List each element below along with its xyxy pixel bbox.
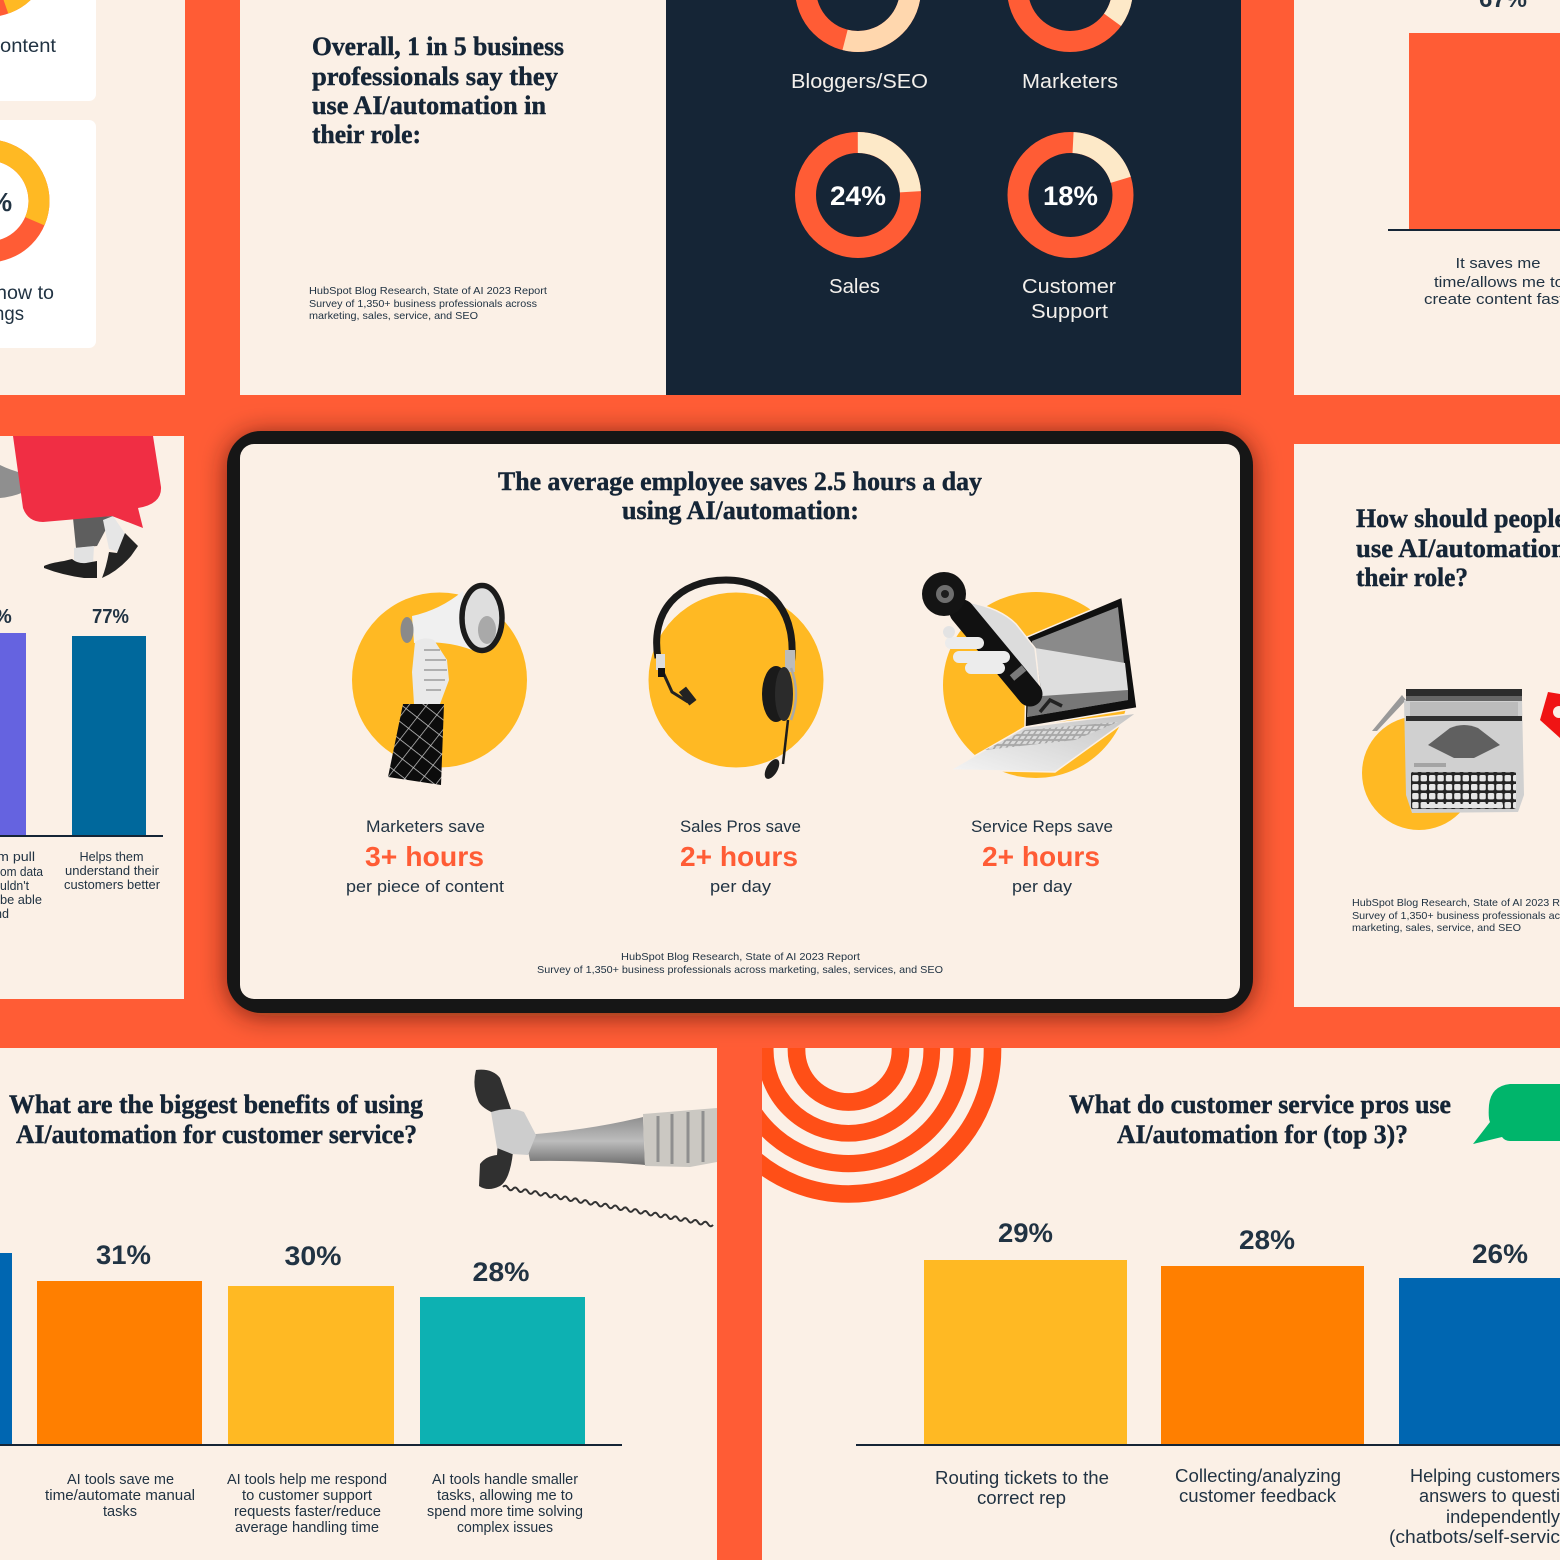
stat: marketers: Marketers save	[366, 818, 485, 836]
icon: red speech bubble	[13, 436, 161, 528]
illustration: headset	[648, 580, 824, 781]
donut: marketers	[1018, 0, 1122, 93]
donut: customer support: Support	[1031, 301, 1108, 323]
heading: average employee: using AI/automation:	[622, 496, 859, 525]
bar caption: It saves me	[1456, 255, 1540, 272]
heading: customer service pros	[1069, 1090, 1451, 1149]
source note	[309, 285, 547, 322]
card: content	[0, 0, 96, 101]
source note: HubSpot Blog Research, State of AI 2023 Report	[621, 951, 860, 963]
panel: middle-right typewriter	[1294, 444, 1560, 1007]
caption: smaller tasks: AI tools handle smaller	[432, 1472, 578, 1488]
heading: average employee: The average employee saves 2.5 hours a day	[498, 467, 982, 496]
caption: customer feedback: customer feedback	[1179, 1486, 1337, 1506]
illustration: megaphone	[352, 586, 527, 785]
source note: HubSpot Blog Research, State of AI 2023 R	[1352, 897, 1560, 909]
stat: service reps: Service Reps save	[971, 818, 1113, 836]
heading: 1 in 5: use AI/automation in	[312, 91, 547, 120]
illustration: walking feet with red bubble	[0, 436, 161, 578]
caption: save time	[45, 1472, 195, 1520]
donut: sales: Sales	[829, 276, 880, 298]
donut: bloggers	[791, 0, 928, 93]
card: know how to	[0, 120, 96, 348]
label: 26%: 26%	[1472, 1239, 1528, 1269]
tablet frame	[227, 431, 1253, 1013]
bar: yellow 29%	[924, 1260, 1127, 1444]
donut: sales: 24%	[830, 181, 886, 211]
panel: top-right bar	[1294, 0, 1560, 395]
bar: purple	[0, 633, 26, 836]
heading: how should people: use AI/automation	[1356, 534, 1560, 563]
stat: service reps: per day	[1012, 877, 1073, 896]
caption: routing tickets	[935, 1468, 1109, 1508]
tablet screen	[240, 444, 1240, 999]
source note: Survey of 1,350+ business professionals ac	[1352, 910, 1560, 922]
icon: red tag	[1540, 692, 1560, 738]
bar caption	[1424, 255, 1560, 308]
caption: respond faster: average handling time	[235, 1520, 379, 1536]
caption: respond faster: requests faster/reduce	[234, 1504, 381, 1520]
panel: central tablet	[227, 431, 1253, 1013]
source note: HubSpot Blog Research, State of AI 2023 Report	[309, 285, 547, 297]
donut: customer support: 18%	[1043, 181, 1098, 211]
heading: 1 in 5: professionals say they	[312, 62, 558, 91]
caption: left bar: uldn't	[0, 878, 29, 893]
donut: marketers: Marketers	[1022, 71, 1118, 93]
bar: yellow 30%	[228, 1286, 394, 1444]
illustration: phone from laptop	[922, 572, 1137, 778]
caption: respond faster: AI tools help me respond	[227, 1472, 387, 1488]
label: 28%: 28%	[1239, 1225, 1295, 1255]
bar: orange 28%	[1161, 1266, 1364, 1444]
caption: routing tickets: correct rep	[977, 1488, 1066, 1508]
bar: orange 31%	[37, 1281, 202, 1444]
label: 28%: 28%	[472, 1257, 530, 1287]
heading: how should people: their role?	[1356, 563, 1468, 592]
caption: smaller tasks: tasks, allowing me to	[437, 1488, 573, 1504]
caption: save time: time/automate manual	[45, 1488, 195, 1504]
stat: sales pros	[680, 818, 801, 896]
bar	[1409, 33, 1560, 230]
donut: customer support	[1015, 140, 1126, 323]
caption: smaller tasks: spend more time solving	[427, 1504, 583, 1520]
caption: left bar: om data	[0, 864, 44, 879]
heading: 1 in 5: their role:	[312, 120, 421, 149]
source note: marketing, sales, service, and SEO	[1352, 922, 1521, 934]
heading: customer service pros: AI/automation for (top 3)?	[1117, 1120, 1408, 1149]
bar caption: create content fast	[1424, 291, 1560, 308]
caption: save time: tasks	[103, 1504, 137, 1520]
caption: helping customers: Helping customers	[1410, 1466, 1560, 1486]
stat: sales pros: Sales Pros save	[680, 818, 801, 836]
caption: save time: AI tools save me	[67, 1472, 174, 1488]
caption: right bar	[64, 849, 161, 892]
bar: blue 26%	[1399, 1278, 1560, 1444]
source note: Survey of 1,350+ business professionals across marketing, sales, services, and SEO	[537, 964, 943, 976]
caption: smaller tasks: complex issues	[457, 1520, 553, 1536]
caption: helping customers	[1389, 1466, 1560, 1547]
stat: marketers: per piece of content	[346, 877, 504, 896]
stat: service reps	[971, 818, 1113, 896]
caption: helping customers: independently	[1446, 1507, 1560, 1527]
heading: biggest benefits: What are the biggest benefits of using	[9, 1090, 423, 1119]
donut: sales	[806, 142, 910, 298]
source note	[1352, 897, 1560, 934]
caption: customer feedback: Collecting/analyzing	[1175, 1466, 1341, 1486]
caption: right bar: Helps them	[80, 849, 144, 864]
heading: customer service pros: What do customer service pros use	[1069, 1090, 1451, 1119]
source note	[537, 951, 943, 976]
stat: marketers	[346, 818, 504, 896]
caption: left bar	[0, 849, 44, 921]
stat: service reps: 2+ hours	[982, 841, 1100, 872]
stat: sales pros: 2+ hours	[680, 841, 798, 872]
panel: top-left donut cards	[0, 0, 185, 395]
heading: 1 in 5	[312, 32, 564, 149]
stat: marketers: 3+ hours	[365, 841, 484, 872]
bar: teal 28%	[420, 1297, 585, 1444]
panel: dark donut charts	[666, 0, 1241, 395]
bar caption: time/allows me to	[1434, 274, 1560, 291]
source note: Survey of 1,350+ business professionals across	[309, 298, 537, 310]
bar: dark blue partial	[0, 1253, 12, 1444]
source note: marketing, sales, service, and SEO	[309, 310, 478, 322]
panel: top-middle light text	[240, 0, 666, 395]
caption: smaller tasks	[427, 1472, 583, 1536]
caption: respond faster: to customer support	[242, 1488, 372, 1504]
heading: biggest benefits: AI/automation for customer service?	[16, 1120, 417, 1149]
stat: sales pros: per day	[710, 877, 772, 896]
caption: right bar: understand their	[65, 863, 160, 878]
caption: right bar: customers better	[64, 877, 161, 892]
panel: bottom-right customer service chart	[704, 906, 1560, 1560]
caption: respond faster	[227, 1472, 387, 1536]
donut: customer support: Customer	[1022, 276, 1116, 298]
decoration: concentric arcs	[762, 1048, 1002, 1203]
label: 77%: 77%	[92, 606, 129, 628]
label: 30%: 30%	[284, 1241, 342, 1271]
heading: average employee	[498, 467, 982, 525]
bar: blue	[72, 636, 146, 836]
panel: middle-left bar chart	[0, 436, 184, 999]
caption: left bar: be able	[0, 892, 42, 907]
icon: green speech bubble	[1473, 1084, 1560, 1144]
donut: bloggers: Bloggers/SEO	[791, 71, 928, 93]
heading: 1 in 5: Overall, 1 in 5 business	[312, 32, 564, 61]
caption: routing tickets: Routing tickets to the	[935, 1468, 1109, 1488]
card: content: ontent	[0, 36, 57, 57]
caption: helping customers: (chatbots/self-servic	[1389, 1527, 1560, 1547]
label: 29%: 29%	[998, 1218, 1053, 1248]
illustration: typewriter	[1362, 689, 1524, 830]
heading: how should people	[1356, 504, 1560, 592]
heading: biggest benefits	[9, 1090, 423, 1149]
label: 31%: 31%	[96, 1240, 151, 1270]
caption: customer feedback	[1175, 1466, 1341, 1506]
illustration: arm holding phone	[474, 1070, 717, 1226]
caption: helping customers: answers to questi	[1419, 1486, 1560, 1506]
panel: bottom-left benefits chart	[0, 1048, 717, 1560]
